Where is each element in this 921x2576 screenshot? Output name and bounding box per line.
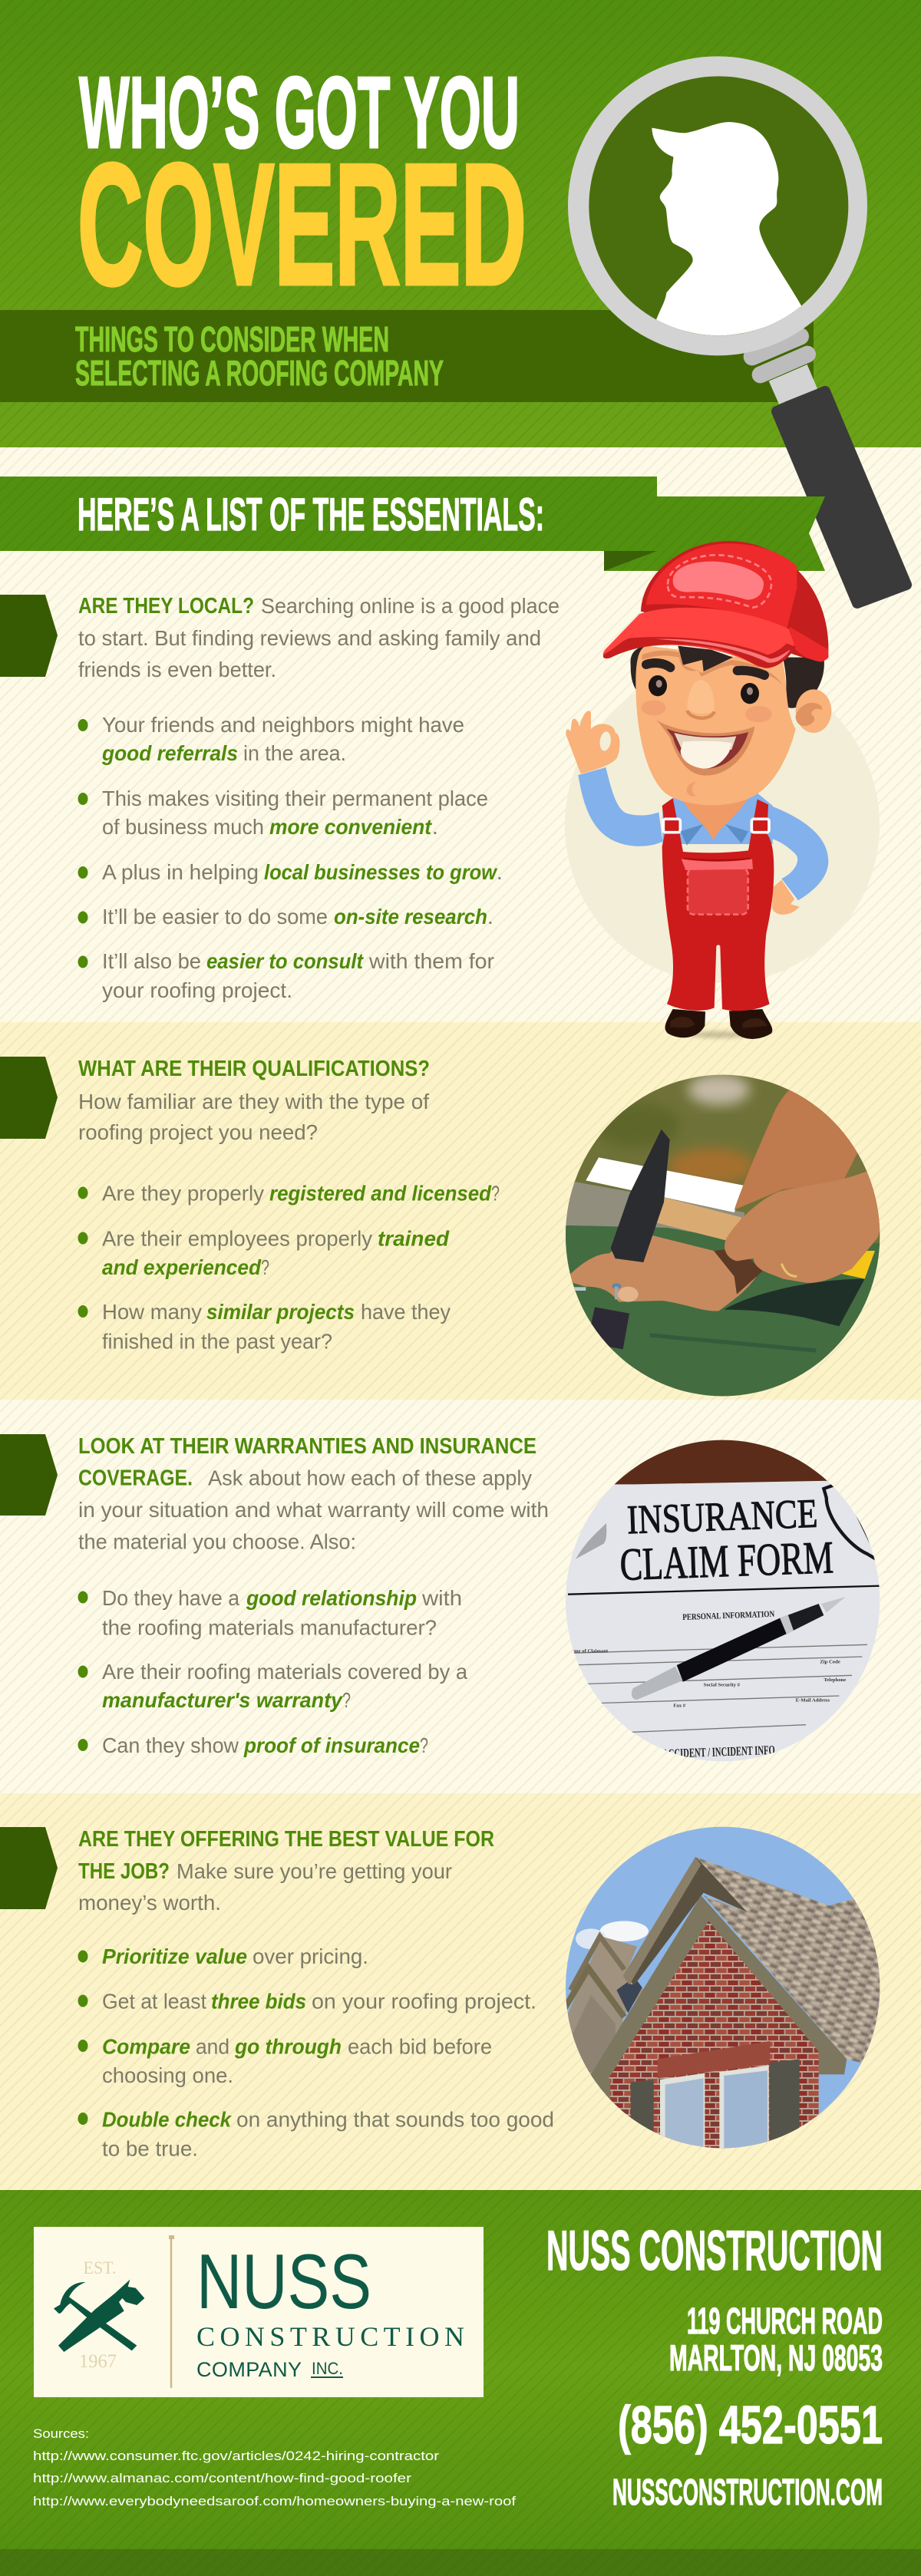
- contact details: [546, 2220, 883, 2513]
- photo: insurance claim form: E-Mail Address: [796, 1698, 830, 1704]
- bullet list: Double check: [102, 2107, 232, 2132]
- bullet list: Get at least: [102, 1989, 206, 2014]
- bullet list: choosing one.: [102, 2063, 233, 2087]
- intro text: Make sure you’re getting your: [177, 1859, 452, 1883]
- tab marker: [0, 595, 58, 677]
- bullet list: Your friends and neighbors might have: [102, 713, 464, 737]
- logo: Nuss Construction: INC.: [312, 2359, 343, 2378]
- bullet list: [78, 1586, 467, 1757]
- bullet list: and experienced: [102, 1255, 262, 1279]
- photo: insurance claim form: ACCIDENT / INCIDENT INFO: [662, 1743, 775, 1761]
- photo: insurance claim form: [560, 1439, 886, 1765]
- intro text: friends is even better.: [78, 658, 276, 681]
- panel: are they local: [0, 594, 560, 1002]
- bullet list: How many: [102, 1300, 202, 1324]
- heading: essentials: HERE’S A LIST OF THE ESSENTIALS:: [78, 489, 544, 540]
- logo: Nuss Construction: NUSS: [196, 2239, 371, 2325]
- bullet list: .: [497, 860, 503, 884]
- photo: insurance claim form: CLAIM FORM: [619, 1532, 834, 1590]
- bullet list: This makes visiting their permanent place: [102, 787, 488, 810]
- bullet list: three bids: [211, 1989, 306, 2014]
- intro text: [78, 594, 560, 681]
- subtitle band: [0, 310, 814, 402]
- sources: Sources:: [33, 2426, 89, 2441]
- logo: Nuss Construction: CONSTRUCTION: [196, 2321, 464, 2352]
- photo: insurance claim form: Telephone: [824, 1677, 846, 1683]
- sources: http://www.consumer.ftc.gov/articles/0242-hiring-contractor: [33, 2449, 439, 2463]
- logo: Nuss Construction: [34, 2227, 484, 2397]
- title: WHO’S GOT YOU: [79, 56, 520, 169]
- intro text: the material you choose. Also:: [78, 1530, 356, 1553]
- bullet list: more convenient: [269, 815, 433, 839]
- bullet list: on anything that sounds too good: [236, 2107, 554, 2132]
- bullet list: over pricing.: [253, 1944, 368, 1968]
- bullet list: [78, 713, 503, 1002]
- title: COVERED: [78, 127, 527, 321]
- intro text: THE JOB?: [78, 1859, 170, 1884]
- photo: insurance claim form: Fax #: [673, 1703, 686, 1708]
- photo: brick house roof: [560, 1826, 886, 2152]
- bullet list: ?: [420, 1733, 428, 1757]
- bullet list: in the area.: [243, 741, 346, 765]
- sources: [33, 2426, 516, 2508]
- bullet list: A plus in helping: [102, 860, 259, 884]
- intro text: WHAT ARE THEIR QUALIFICATIONS?: [78, 1057, 430, 1081]
- bullet list: Can they show: [102, 1733, 239, 1757]
- bullet list: with them for: [368, 949, 494, 973]
- photo: insurance claim form: Zip Code: [820, 1660, 840, 1665]
- logo: Nuss Construction: 1967: [79, 2351, 117, 2372]
- bullet list: manufacturer's warranty: [102, 1688, 343, 1712]
- intro text: LOOK AT THEIR WARRANTIES AND INSURANCE: [78, 1434, 536, 1459]
- intro text: Searching online is a good place: [261, 594, 560, 618]
- sources: http://www.almanac.com/content/how-find-good-roofer: [33, 2471, 411, 2485]
- title: [78, 56, 527, 321]
- bullet list: easier to consult: [206, 949, 365, 973]
- logo: Nuss Construction: COMPANY: [196, 2358, 302, 2381]
- bullet list: [78, 1944, 554, 2161]
- cap patch: [668, 555, 771, 608]
- intro text: [78, 1434, 549, 1553]
- bullet list: each bid before: [348, 2035, 492, 2058]
- subtitle: [75, 319, 444, 393]
- pen: [632, 1597, 846, 1700]
- bullet list: .: [487, 905, 494, 928]
- bullet list: with: [421, 1586, 462, 1610]
- bullet list: It’ll also be: [102, 949, 201, 973]
- photo: insurance claim form: INSURANCE: [626, 1490, 818, 1542]
- subtitle: SELECTING A ROOFING COMPANY: [75, 353, 444, 393]
- bullet list: Do they have a: [102, 1586, 239, 1610]
- tab marker: [0, 1057, 58, 1139]
- photo: insurance claim form: PERSONAL INFORMATION: [682, 1610, 775, 1622]
- bullet list: good referrals: [101, 741, 238, 765]
- bullet list: and: [196, 2035, 229, 2058]
- bullet list: on your roofing project.: [312, 1989, 536, 2014]
- intro text: to start. But finding reviews and asking family and: [78, 626, 541, 650]
- intro text: money’s worth.: [78, 1891, 221, 1915]
- bullet list: .: [432, 815, 438, 839]
- bullet list: ?: [491, 1182, 500, 1205]
- photo: insurance claim form: Name of Claimant: [568, 1648, 609, 1654]
- icon: crossed hammer and saw: [54, 2280, 144, 2352]
- section backgrounds: [0, 447, 921, 2190]
- bullet list: ?: [261, 1255, 269, 1279]
- intro text: [78, 1827, 494, 1915]
- ribbon heading: [0, 477, 825, 571]
- bullet list: Are they properly: [102, 1182, 264, 1205]
- bullet list: It’ll be easier to do some: [102, 905, 328, 928]
- sources: http://www.everybodyneedsaroof.com/homeowners-buying-a-new-roof: [33, 2494, 516, 2508]
- bullet list: go through: [234, 2035, 342, 2058]
- photo: hammering a roof nail: [560, 1074, 886, 1400]
- panel: warranties and insurance: [0, 1434, 886, 1765]
- tab marker: [0, 1827, 58, 1909]
- intro text: in your situation and what warranty will come with: [78, 1498, 549, 1522]
- logo: Nuss Construction: EST.: [83, 2258, 117, 2278]
- bullet list: similar projects: [206, 1300, 355, 1324]
- intro text: How familiar are they with the type of: [78, 1090, 429, 1113]
- footer: [0, 2190, 921, 2576]
- bullet list: good relationship: [246, 1586, 417, 1610]
- intro text: Ask about how each of these apply: [208, 1466, 532, 1490]
- intro text: [78, 1057, 430, 1144]
- bullet list: Compare: [102, 2035, 190, 2058]
- panel: qualifications: [0, 1057, 886, 1400]
- bullet list: Are their roofing materials covered by a: [102, 1660, 467, 1684]
- bullet list: proof of insurance: [243, 1733, 420, 1757]
- bullet list: on-site research: [334, 905, 487, 928]
- bullet list: trained: [378, 1226, 450, 1251]
- icon: magnifying glass: [568, 56, 906, 603]
- bullet list: Prioritize value: [102, 1944, 247, 1968]
- bullet list: [78, 1182, 500, 1354]
- bullet list: ?: [342, 1688, 351, 1712]
- tab marker: [0, 1434, 58, 1516]
- intro text: COVERAGE.: [78, 1466, 193, 1490]
- bullet list: finished in the past year?: [102, 1329, 332, 1354]
- bullet list: registered and licensed: [269, 1182, 492, 1205]
- bullet list: of business much: [102, 815, 264, 839]
- photo: insurance claim form: Social Security #: [704, 1683, 741, 1688]
- intro text: ARE THEY LOCAL?: [78, 594, 254, 618]
- header background: [0, 0, 921, 447]
- intro text: ARE THEY OFFERING THE BEST VALUE FOR: [78, 1827, 494, 1852]
- bullet list: local businesses to grow: [264, 860, 498, 884]
- bullet list: have they: [361, 1300, 451, 1324]
- bullet list: Are their employees properly: [102, 1226, 372, 1251]
- icon: person silhouette: [652, 122, 802, 335]
- subtitle: THINGS TO CONSIDER WHEN: [75, 319, 389, 359]
- illustration: roofer character: [565, 541, 880, 1039]
- intro text: roofing project you need?: [78, 1120, 318, 1144]
- bullet list: your roofing project.: [102, 978, 292, 1002]
- panel: best value: [0, 1826, 886, 2161]
- bullet list: to be true.: [102, 2136, 198, 2161]
- bullet list: the roofing materials manufacturer?: [102, 1616, 437, 1639]
